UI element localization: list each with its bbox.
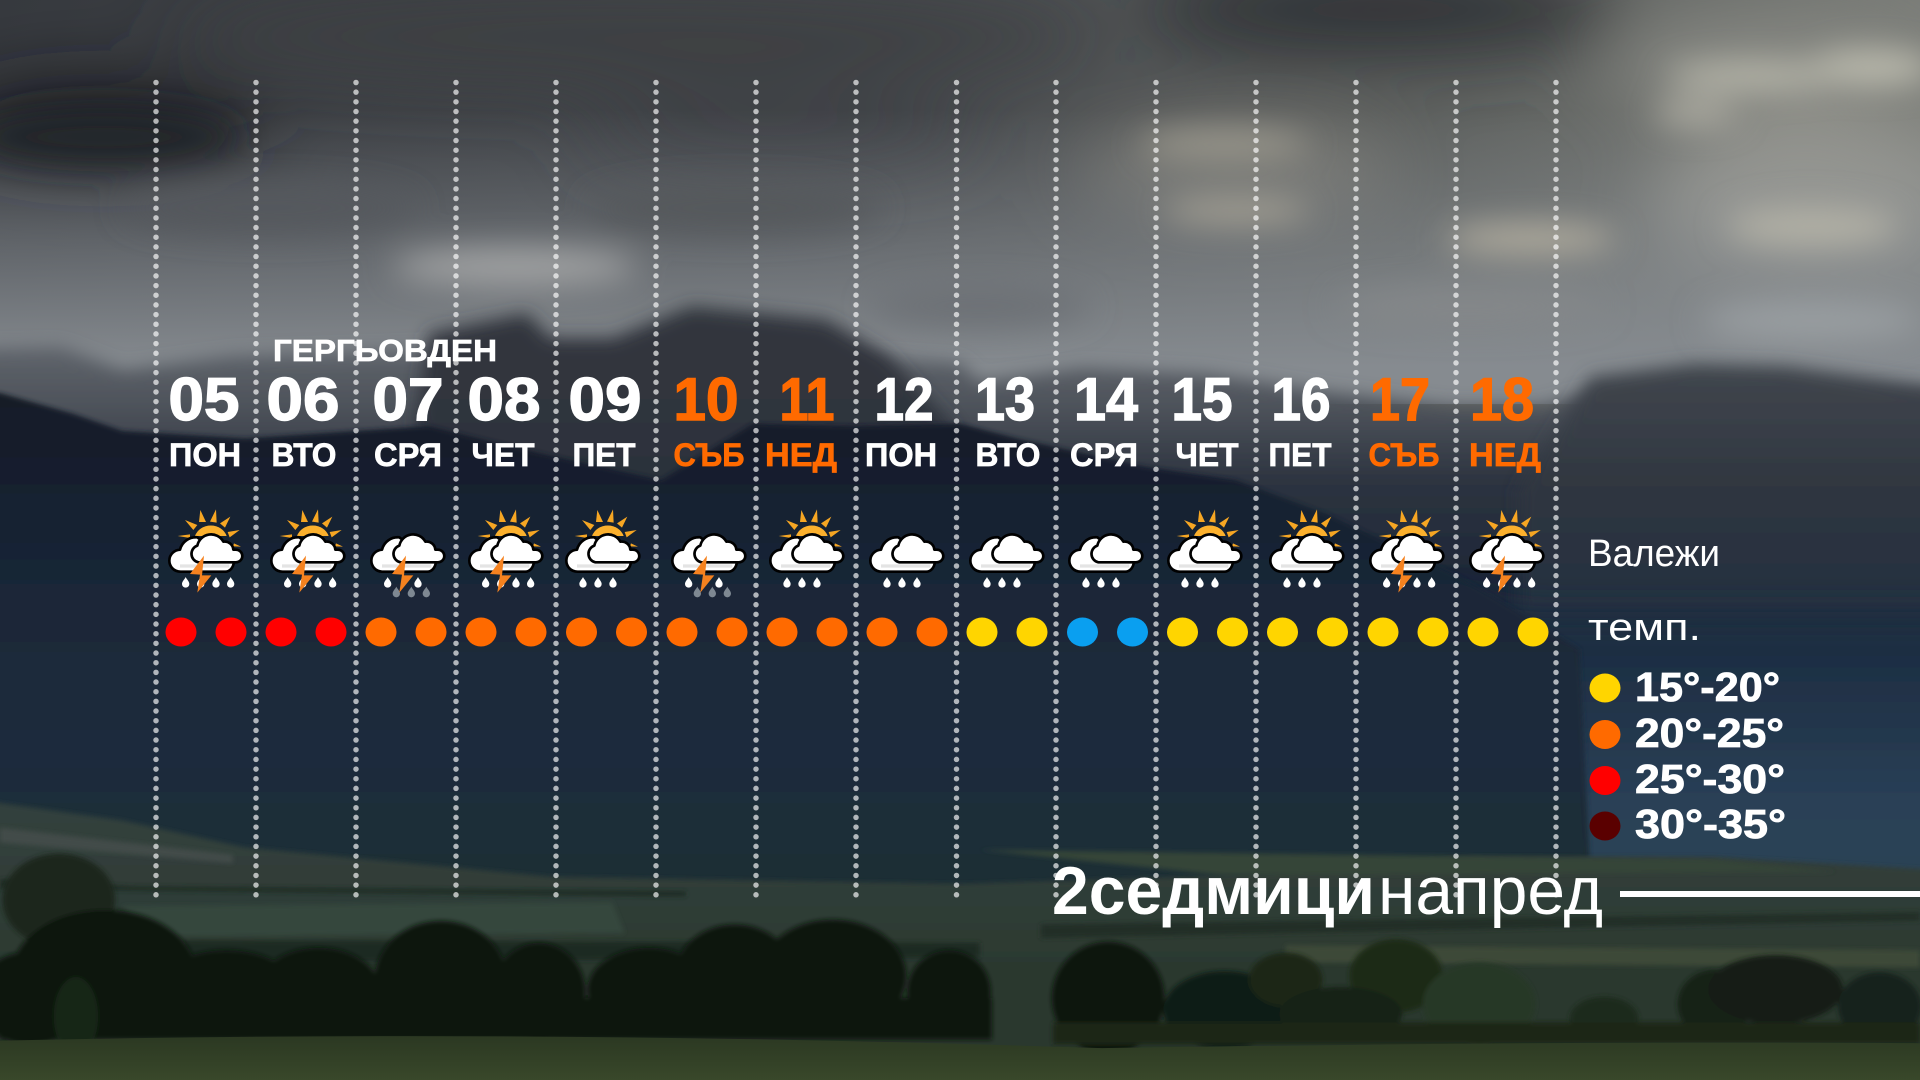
fog bank hugging the ridge <box>0 347 1920 686</box>
day numbers: 15 <box>1172 366 1232 433</box>
icon: storm with sun, 05 <box>169 509 242 593</box>
day numbers: 11 <box>780 366 834 433</box>
weekday labels: ПЕТ <box>572 437 636 473</box>
weekday labels: ПОН <box>865 437 937 473</box>
title: two weeks ahead <box>1052 853 1603 929</box>
icon: storm with sun, 18 <box>1470 509 1543 593</box>
dark and light cloud masses <box>0 0 1920 294</box>
day numbers: 07 <box>372 366 444 433</box>
icon: rain, 13 <box>970 534 1043 588</box>
icon: heavy storm, 10 <box>672 534 745 597</box>
icon: heavy storm, 07 <box>371 534 444 597</box>
icon: sun and rain, 15 <box>1168 509 1241 588</box>
holiday label: ГЕРГЬОВДЕН <box>273 333 497 368</box>
foreground grass <box>0 1036 1920 1080</box>
dotted day separators <box>156 82 1556 898</box>
title rule <box>1620 891 1920 897</box>
temperature dots row <box>166 618 1548 646</box>
icon: rain, 12 <box>870 534 943 588</box>
horizon haze <box>0 0 1920 404</box>
weekday labels: ПОН <box>169 437 241 473</box>
dark cloud bank right <box>1518 364 1920 686</box>
dark cloud hump centre <box>416 306 955 539</box>
weekday labels: ПЕТ <box>1268 437 1332 473</box>
icon: storm with sun, 06 <box>271 509 344 593</box>
day numbers: 05 <box>168 366 240 433</box>
title: two weeks ahead: напред <box>1378 853 1603 929</box>
trees <box>0 853 1920 1056</box>
icon: sun and rain, 16 <box>1270 509 1343 588</box>
day numbers: 08 <box>468 366 540 433</box>
day numbers: 13 <box>975 366 1035 433</box>
legend: temperature ranges <box>1590 664 1786 847</box>
legend: temperature ranges: 15°-20° <box>1635 664 1780 710</box>
day numbers: 14 <box>1074 366 1139 433</box>
day numbers: 17 <box>1370 366 1430 433</box>
icon: rain, 14 <box>1069 534 1142 588</box>
right slope in shadow <box>1327 576 1920 931</box>
weekday labels: ВТО <box>976 437 1040 473</box>
weekday labels: СЪБ <box>674 437 744 473</box>
row label: temperature: темп. <box>1588 607 1701 649</box>
day numbers: 10 <box>674 366 738 433</box>
day numbers: 06 <box>266 366 340 433</box>
icon: sun and rain, 11 <box>770 509 843 588</box>
day numbers <box>168 366 1534 433</box>
day numbers: 16 <box>1272 366 1330 433</box>
legend: temperature ranges: 25°-30° <box>1635 756 1785 802</box>
weekday labels: СРЯ <box>374 437 442 473</box>
weekday labels: ВТО <box>272 437 336 473</box>
weekday labels: ЧЕТ <box>472 437 535 473</box>
weekday labels: СРЯ <box>1070 437 1138 473</box>
weekday labels <box>169 437 1541 473</box>
legend: temperature ranges: 20°-25° <box>1635 710 1784 756</box>
mountain range <box>0 389 1592 906</box>
icon: sun and rain, 09 <box>566 509 639 588</box>
legend: temperature ranges: 30°-35° <box>1635 801 1786 847</box>
weekday labels: ЧЕТ <box>1176 437 1239 473</box>
valley and fields <box>0 796 1920 1080</box>
weekday labels: НЕД <box>1469 437 1541 473</box>
weekday labels: СЪБ <box>1368 437 1440 473</box>
row label: precipitation: Валежи <box>1588 533 1720 575</box>
weekday labels: НЕД <box>765 437 837 473</box>
day numbers: 12 <box>874 366 934 433</box>
icon: storm with sun, 17 <box>1370 509 1443 593</box>
icon: storm with sun, 08 <box>469 509 542 593</box>
day numbers: 18 <box>1470 366 1534 433</box>
day numbers: 09 <box>568 366 642 433</box>
title: two weeks ahead: 2седмици <box>1052 853 1375 929</box>
